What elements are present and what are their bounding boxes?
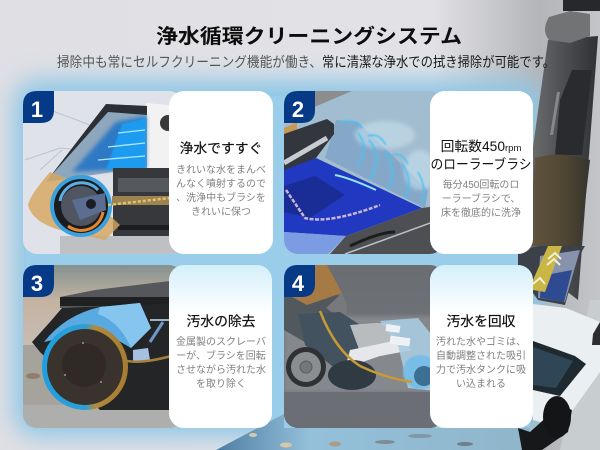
text card 3 xyxy=(169,265,272,428)
text card 1: 浄水ですすぐ xyxy=(180,141,262,156)
text card 2: 回転数450rpm xyxy=(441,139,521,154)
panel 2 illustration xyxy=(284,91,444,254)
text card 3: させながら汚れた水 xyxy=(176,363,266,376)
panel 1: 浄水ですすぐ xyxy=(23,91,273,254)
text card 1: きれいに保つ xyxy=(191,205,251,218)
head xyxy=(533,304,600,428)
floor behind the head xyxy=(560,300,600,450)
text card 2 xyxy=(430,91,533,254)
panel 1 illustration xyxy=(23,91,185,254)
text card 1 xyxy=(169,91,273,254)
number badge 1 xyxy=(23,91,54,123)
text card 2: 毎分450回転のロ xyxy=(443,178,519,191)
panel 3 illustration xyxy=(23,265,183,428)
number badge 3: 3 xyxy=(31,271,43,296)
yellow flow xyxy=(533,246,562,292)
panel 3: 汚水の除去 xyxy=(23,265,272,428)
floor at bottom xyxy=(216,414,530,450)
text card 2: ーラーブラシで、 xyxy=(442,192,520,205)
text card 3: を取り除く xyxy=(196,377,246,390)
number badge 2: 2 xyxy=(292,97,304,122)
text card 2: のローラーブラシ xyxy=(430,156,532,172)
panel 2: 回転数450rpmのローラーブラシ xyxy=(284,91,533,254)
text card 4: い込まれる xyxy=(456,378,506,390)
text card 1: きれいな水をまんべ xyxy=(176,164,266,176)
panel 4: 汚水を回収 xyxy=(284,265,533,428)
text card 1: んなく噴射するので xyxy=(176,178,266,190)
text card 4 xyxy=(430,265,533,428)
collar xyxy=(518,246,585,305)
wheel xyxy=(518,405,572,450)
panel 4 illustration xyxy=(284,265,444,428)
number badge 1: 1 xyxy=(31,97,43,122)
text card 4: 汚れた水やゴミは、 xyxy=(436,335,526,348)
text card 2: 床を徹底的に洗浄 xyxy=(441,206,521,219)
title: 浄水循環クリーニングシステム xyxy=(156,24,462,48)
text card 1: 、洗浄中もブラシを xyxy=(176,191,266,204)
text card 4: 汚水を回収 xyxy=(447,314,516,329)
handle top xyxy=(563,0,600,11)
text card 4: 力で汚水タンクに吸 xyxy=(436,363,526,376)
text card 4: 自動調整された吸引 xyxy=(436,349,526,362)
number badge 4 xyxy=(284,265,315,297)
text card 3: 金属製のスクレーバ xyxy=(176,335,266,348)
dirty water xyxy=(529,154,590,246)
head window xyxy=(533,341,586,396)
text card 3: 汚水の除去 xyxy=(187,314,256,329)
number badge 3 xyxy=(23,265,54,297)
number badge 4: 4 xyxy=(292,271,305,296)
tank body xyxy=(518,36,598,300)
tank cap xyxy=(545,11,590,43)
subtitle: 掃除中も常にセルフクリーニング機能が働き、 xyxy=(57,54,322,70)
text card 3: ーが、ブラシを回転 xyxy=(176,349,266,362)
vacuum cleaner on the right xyxy=(518,0,600,450)
number badge 2 xyxy=(284,91,315,123)
subtitle emphasis: 常に清潔な浄水での拭き掃除が可能です。 xyxy=(322,54,555,70)
